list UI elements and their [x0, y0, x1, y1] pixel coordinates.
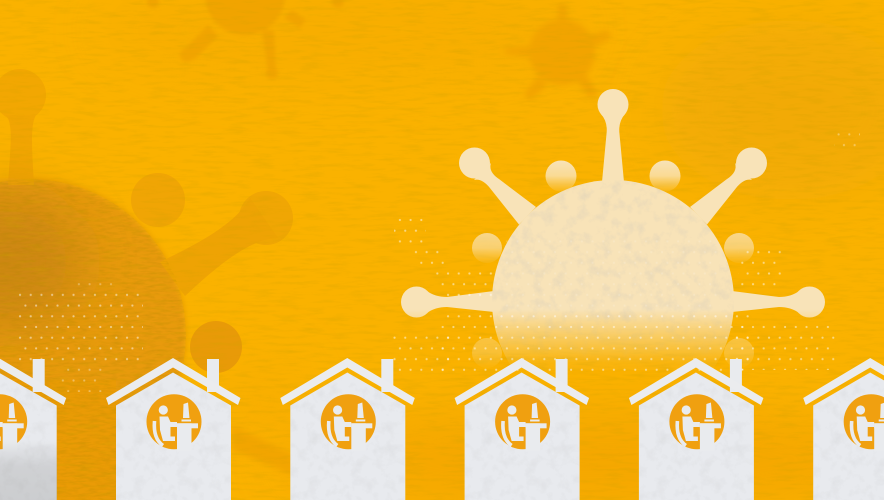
halftone dots	[18, 132, 860, 392]
grey wear on the lower part of house 1	[0, 440, 57, 500]
background virus: top centre	[147, 0, 344, 79]
house 2	[106, 358, 240, 500]
dark scuffing on the left silhouette	[0, 170, 190, 500]
virus body and long spikes	[401, 89, 825, 370]
house 6: cropped at right edge	[803, 358, 884, 500]
house row	[0, 358, 884, 500]
house 1: cropped at left edge	[0, 358, 66, 500]
house 4	[455, 358, 589, 500]
background virus: large silhouette at lower left	[0, 69, 300, 500]
main virus sun	[401, 89, 825, 370]
house 5	[629, 358, 763, 500]
mottled grey wear on the body	[492, 182, 730, 352]
house 3	[280, 358, 415, 500]
small virus buds	[472, 160, 754, 368]
dark wash over the left edge	[0, 192, 85, 332]
background virus: upper right	[505, 4, 612, 100]
